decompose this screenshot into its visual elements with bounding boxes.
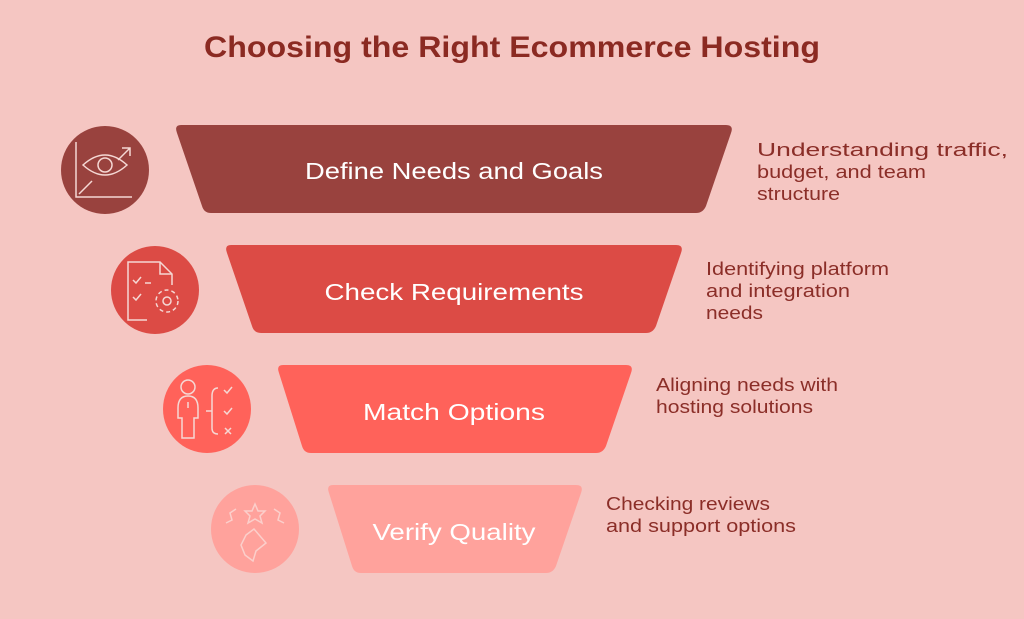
description 3: hosting solutions bbox=[656, 397, 813, 417]
description 1 bbox=[757, 140, 1008, 204]
step 1 bbox=[61, 125, 1008, 214]
step 3 bbox=[163, 365, 838, 453]
icon: person options bbox=[163, 365, 251, 453]
label 2: Check Requirements bbox=[324, 279, 584, 305]
icon: stars review bbox=[211, 485, 299, 573]
description 2: Identifying platform bbox=[706, 259, 889, 279]
step 2 bbox=[111, 245, 889, 334]
label 1: Define Needs and Goals bbox=[305, 158, 603, 184]
description 2: and integration bbox=[706, 281, 850, 301]
step 4 bbox=[211, 485, 796, 573]
description 1: structure bbox=[757, 184, 840, 204]
description 4 bbox=[606, 494, 796, 536]
funnel bar 3 bbox=[278, 365, 632, 453]
funnel bar 2 bbox=[226, 245, 682, 333]
description 3 bbox=[656, 375, 838, 417]
description 3: Aligning needs with bbox=[656, 375, 838, 395]
title: Choosing the Right Ecommerce Hosting bbox=[204, 31, 820, 64]
description 4: Checking reviews bbox=[606, 494, 770, 514]
funnel bar 1 bbox=[176, 125, 732, 213]
description 1: budget, and team bbox=[757, 162, 926, 182]
label 3: Match Options bbox=[363, 399, 545, 425]
description 2 bbox=[706, 259, 889, 323]
label 4: Verify Quality bbox=[372, 519, 536, 545]
icon: eye chart bbox=[61, 126, 149, 214]
description 4: and support options bbox=[606, 516, 796, 536]
funnel bar 4 bbox=[328, 485, 582, 573]
description 2: needs bbox=[706, 303, 763, 323]
icon: checklist gear bbox=[111, 246, 199, 334]
description 1: Understanding traffic, bbox=[757, 140, 1008, 160]
